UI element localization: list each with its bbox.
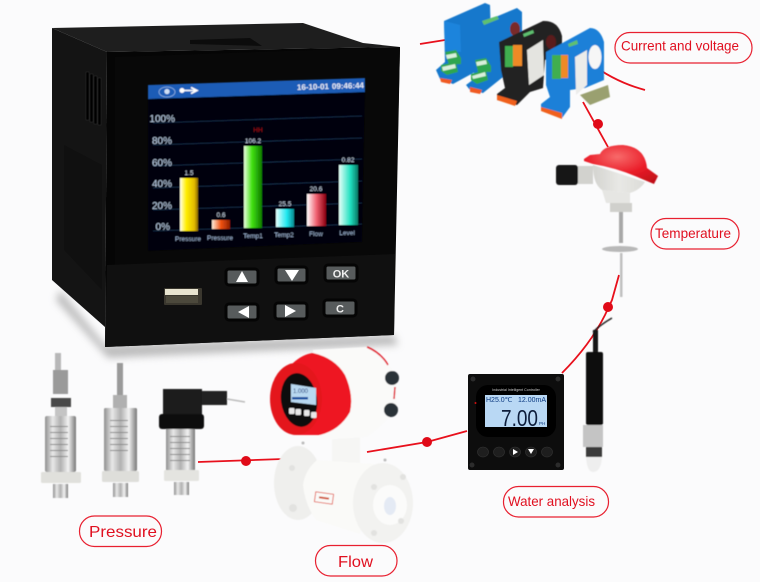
water analysis controller: Industrial Intelligent Controller — [492, 388, 541, 392]
chart axis labels: 100% — [149, 114, 175, 125]
controller display — [485, 395, 547, 431]
bar value labels: 25.5 — [279, 201, 292, 208]
controller display: 7.00 — [501, 405, 538, 431]
bar category labels: Pressure — [207, 235, 233, 242]
pressure sensor 1 — [41, 353, 81, 498]
bar value labels — [184, 127, 355, 219]
bar category labels: Level — [339, 230, 355, 237]
terminal head body — [593, 165, 645, 212]
pressure transmitters — [41, 353, 245, 498]
chart axis labels: 40% — [152, 179, 172, 190]
transducer 3 black — [497, 21, 562, 106]
label: temperature — [651, 218, 739, 249]
pressure sensor 2 — [102, 363, 139, 497]
flow tube — [274, 436, 413, 543]
bar category labels: Temp1 — [243, 233, 263, 240]
water quality electrode probe — [583, 318, 612, 472]
probe stem and flange — [602, 212, 638, 297]
chart axis labels: 0% — [156, 222, 170, 233]
screen status bar: 09:46:44 — [332, 81, 365, 91]
label: temperature: Temperature — [655, 225, 731, 241]
pressure sensor 3 — [159, 389, 245, 495]
bar category labels: Flow — [309, 231, 323, 238]
bar category labels: Temp2 — [274, 232, 294, 239]
side vent slots — [86, 72, 101, 125]
label: current and voltage — [615, 32, 752, 63]
bar value labels: 20.6 — [310, 186, 323, 193]
converter housing: 1.000 — [293, 389, 309, 395]
chart grid lines — [153, 116, 362, 231]
bar value labels: HH — [253, 127, 263, 134]
label: water analysis: Water analysis — [508, 493, 595, 509]
chart axis labels: 80% — [152, 136, 172, 147]
temperature sensor — [556, 145, 658, 297]
controller display: H25.0℃ — [486, 397, 513, 404]
bar category labels — [175, 230, 355, 243]
recorder screen — [148, 78, 365, 251]
label: flow: Flow — [338, 554, 373, 571]
cable gland — [556, 165, 593, 185]
connecting red signal wires — [198, 40, 645, 466]
water analysis controller — [468, 374, 564, 470]
chart axis labels — [149, 114, 175, 233]
paperless recorder device — [52, 23, 400, 358]
chart axis labels: 20% — [152, 201, 172, 212]
screen status bar: 16-10-01 — [297, 82, 330, 92]
controller screws — [470, 376, 560, 468]
screen status bar — [148, 78, 365, 99]
din rail — [580, 85, 610, 105]
label: current and voltage: Current and voltage — [621, 38, 739, 54]
bar value labels: 0.82 — [342, 157, 355, 164]
keypad buttons — [226, 265, 357, 320]
recorder housing — [52, 23, 400, 347]
chart axis labels: 60% — [152, 158, 172, 169]
label: pressure — [80, 516, 162, 546]
bar value labels: 0.6 — [216, 212, 226, 219]
controller display: PH — [539, 421, 545, 426]
bar value labels: 1.5 — [184, 170, 194, 177]
chart bars — [180, 146, 358, 231]
red dome lid — [584, 145, 658, 184]
label: pressure: Pressure — [89, 524, 157, 541]
label: water analysis — [504, 486, 608, 517]
keypad buttons: OK — [333, 268, 349, 280]
USB port — [164, 288, 202, 305]
controller display: 12.00mA — [518, 397, 546, 404]
bar value labels: 106.2 — [245, 138, 262, 145]
keypad buttons: C — [336, 304, 344, 316]
transducer 2 — [466, 8, 522, 94]
label: flow — [316, 546, 397, 576]
transducer 4 — [541, 28, 604, 119]
bar category labels: Pressure — [175, 236, 201, 243]
controller buttons — [478, 447, 552, 457]
electromagnetic flow meter — [270, 347, 413, 543]
current and voltage transducers — [436, 3, 610, 119]
converter housing — [270, 347, 399, 440]
transducer 1 — [436, 3, 491, 84]
